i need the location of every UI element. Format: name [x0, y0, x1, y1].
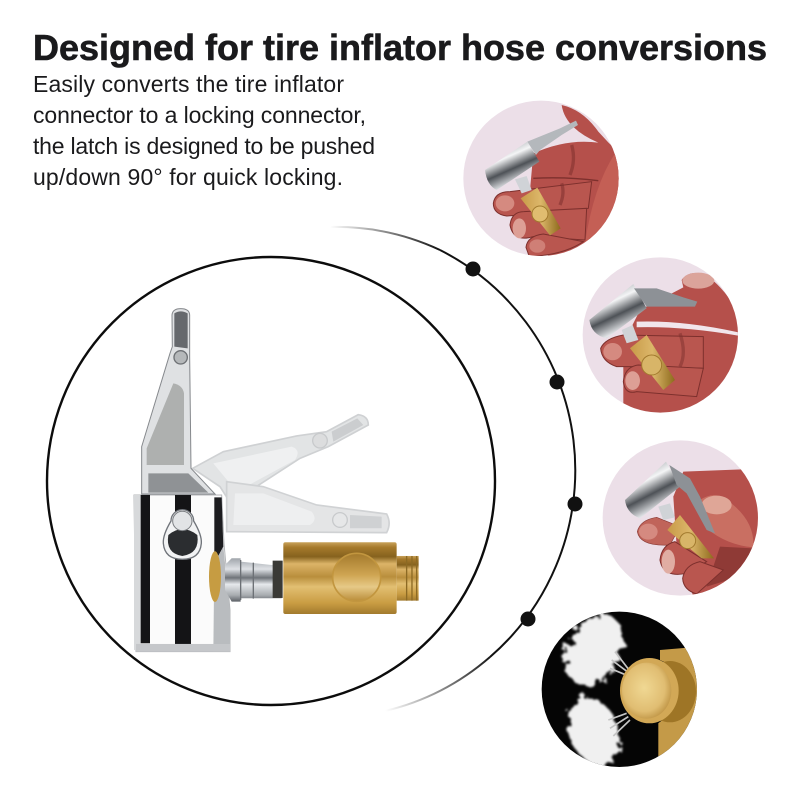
- description text: the latch is designed to be pushed: [33, 133, 375, 159]
- chrome body: [134, 495, 230, 652]
- photo 3: lever locked: [603, 440, 763, 597]
- silver stem: [225, 558, 283, 602]
- photo 4: brass nozzle air jets: [542, 605, 700, 773]
- backdrop: [542, 612, 697, 767]
- ghost lever: lowered position: [227, 482, 389, 533]
- keyhole slot and rivet: [163, 510, 201, 559]
- dot 4: [520, 612, 536, 626]
- brass block: [283, 542, 397, 614]
- photo 1: lever raised in hand: [463, 101, 623, 263]
- gold cylinder: [661, 661, 696, 722]
- hand: [601, 273, 743, 423]
- description text: up/down 90° for quick locking.: [33, 164, 343, 190]
- description text: connector to a locking connector,: [33, 102, 366, 128]
- backdrop: [583, 257, 738, 413]
- backdrop: [463, 101, 619, 256]
- brass washer: [209, 551, 221, 602]
- gold nozzle face: [622, 663, 671, 719]
- dot 1: [466, 262, 480, 276]
- chuck in hand: [589, 284, 697, 390]
- air puffs: [560, 613, 628, 766]
- brass side port: [333, 553, 381, 601]
- title: Designed for tire inflator hose conversions: [33, 27, 767, 68]
- lever upright: [142, 309, 215, 494]
- outer connecting arc with dots: [330, 227, 582, 711]
- gold mount: [658, 647, 700, 757]
- backdrop: [603, 440, 758, 596]
- chuck in hand: [485, 121, 578, 235]
- description text: [33, 71, 375, 190]
- gold nozzle rim: [620, 658, 679, 723]
- photo 2: lever mid position: [583, 257, 743, 423]
- hand: [637, 469, 763, 597]
- ghost lever: raised position: [193, 415, 368, 503]
- air jets: [608, 652, 632, 736]
- chuck in hand: [625, 462, 715, 558]
- description text: Easily converts the tire inflator: [33, 71, 344, 97]
- dot 3: [568, 496, 582, 512]
- large circle outline: [47, 257, 495, 705]
- main product: lock-on air chuck: [134, 309, 419, 652]
- dot 2: [550, 374, 564, 390]
- hand: [493, 105, 623, 263]
- brass thread: [397, 556, 419, 601]
